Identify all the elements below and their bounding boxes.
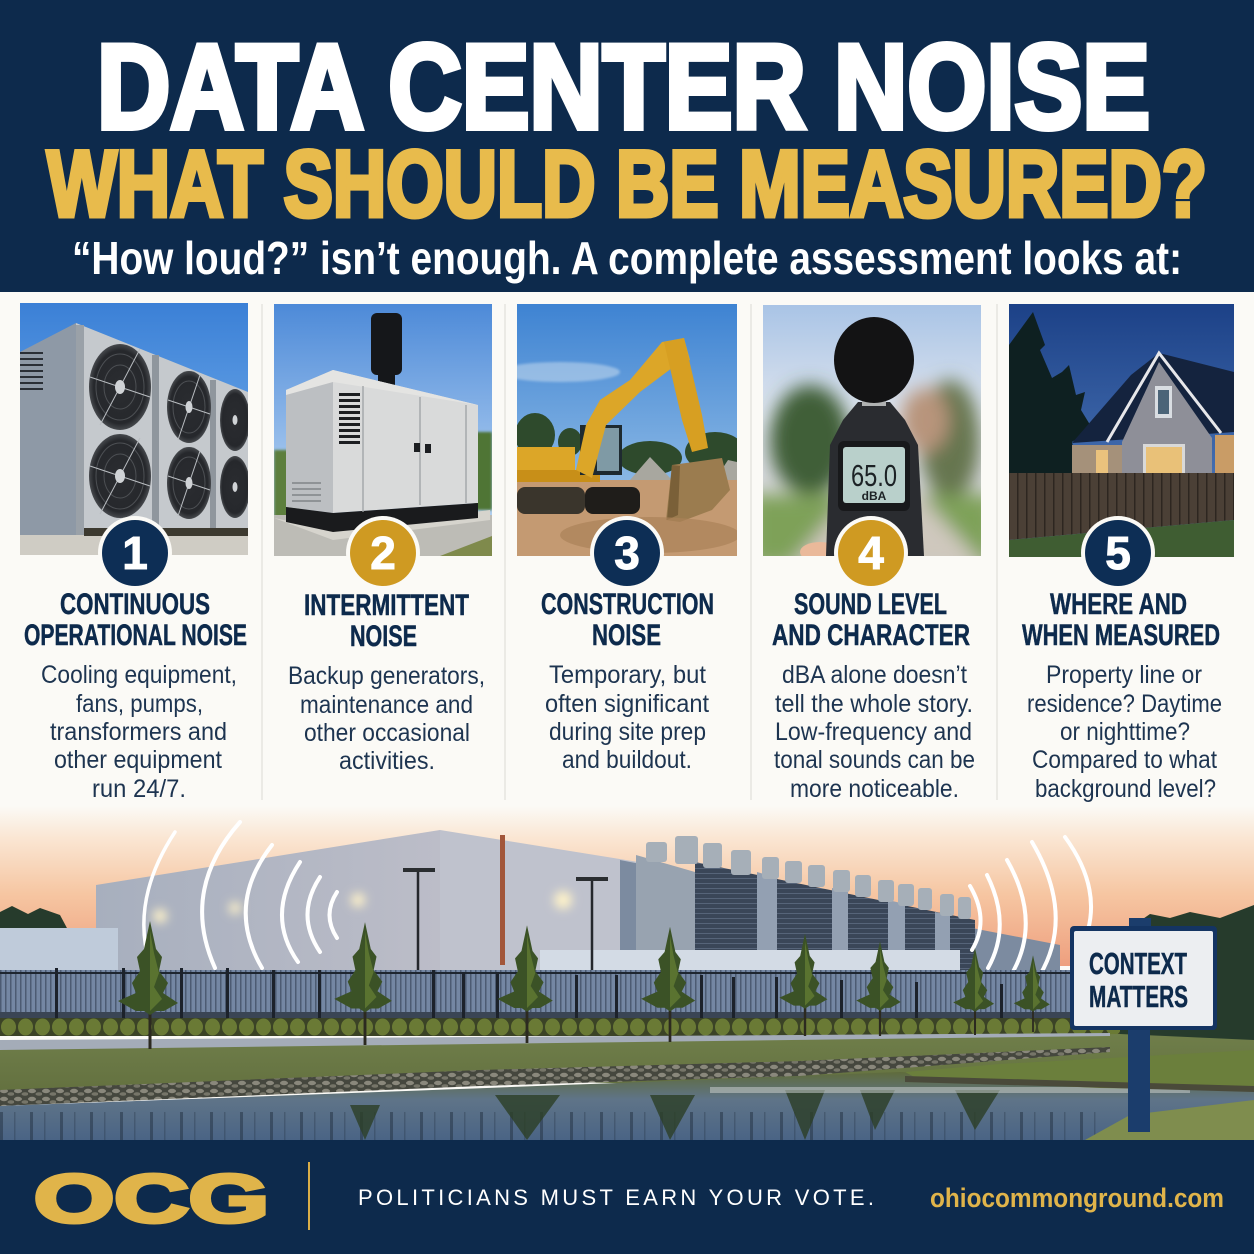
body 3: and buildout. bbox=[562, 746, 692, 774]
body 2 bbox=[288, 662, 485, 775]
heading 2: INTERMITTENT bbox=[304, 589, 469, 622]
panel: where and when measured bbox=[1009, 304, 1234, 803]
website: ohiocommonground.com bbox=[930, 1183, 1224, 1213]
badge 4 bbox=[834, 516, 908, 590]
badge 2: 2 bbox=[370, 527, 396, 579]
trees bbox=[118, 921, 1050, 1049]
tagline: POLITICIANS MUST EARN YOUR VOTE. bbox=[358, 1185, 874, 1210]
photo: excavator bbox=[517, 304, 737, 556]
photo: backup generator bbox=[274, 304, 492, 556]
sky bbox=[0, 806, 1254, 966]
photo: cooling fans bbox=[20, 303, 250, 555]
rock bank bbox=[0, 1047, 1110, 1106]
heading 5 bbox=[1022, 588, 1220, 652]
header banner bbox=[0, 0, 1254, 292]
road bbox=[0, 1033, 1110, 1050]
photo: sound level meter bbox=[763, 305, 981, 556]
badge 3: 3 bbox=[614, 527, 640, 579]
body 5 bbox=[1027, 661, 1222, 803]
body 1: transformers and bbox=[50, 718, 227, 746]
badge 1: 1 bbox=[122, 527, 148, 579]
body 5: or nighttime? bbox=[1060, 718, 1190, 746]
heading 3 bbox=[541, 588, 714, 652]
heading 4: AND CHARACTER bbox=[772, 619, 970, 652]
body 4: tonal sounds can be bbox=[774, 746, 975, 774]
heading 5: WHERE AND bbox=[1050, 588, 1187, 621]
hedge row bbox=[0, 1018, 1120, 1036]
photo: house at dusk bbox=[1009, 304, 1234, 557]
body 1: fans, pumps, bbox=[76, 690, 203, 718]
panel: continuous operational noise bbox=[20, 303, 250, 803]
lawn bbox=[0, 1034, 1254, 1090]
far bank bbox=[905, 1050, 1254, 1090]
body 3: often significant bbox=[545, 690, 709, 718]
badge 5: 5 bbox=[1105, 527, 1131, 579]
body 4: more noticeable. bbox=[790, 775, 959, 803]
sign: MATTERS bbox=[1089, 979, 1188, 1014]
logo: OCG: OCG bbox=[34, 1161, 269, 1237]
body 3: Temporary, but bbox=[549, 661, 706, 689]
badge 3 bbox=[590, 516, 664, 590]
sound waves bbox=[144, 822, 1091, 980]
body 2: other occasional bbox=[304, 719, 470, 747]
body 2: maintenance and bbox=[300, 691, 473, 719]
panel: sound level and character bbox=[763, 305, 981, 797]
badge 5 bbox=[1081, 516, 1155, 590]
heading 4 bbox=[772, 588, 970, 652]
body 2: Backup generators, bbox=[288, 662, 485, 690]
photo: sound level meter: dBA bbox=[862, 489, 887, 503]
body 5: Property line or bbox=[1046, 661, 1202, 689]
body 4: tell the whole story. bbox=[775, 690, 973, 718]
body 5: residence? Daytime bbox=[1027, 690, 1222, 718]
heading 1 bbox=[24, 588, 247, 652]
body 1: run 24/7. bbox=[92, 775, 186, 803]
body 1: other equipment bbox=[54, 746, 222, 774]
body 5: background level? bbox=[1035, 775, 1216, 803]
heading 3: CONSTRUCTION bbox=[541, 588, 714, 621]
pond bbox=[0, 1072, 1254, 1140]
heading 1: CONTINUOUS bbox=[60, 588, 210, 621]
badge 2 bbox=[346, 516, 420, 590]
heading 3: NOISE bbox=[592, 619, 661, 652]
heading 4: SOUND LEVEL bbox=[794, 588, 947, 621]
footer bbox=[0, 1140, 1254, 1254]
body 3: during site prep bbox=[549, 718, 706, 746]
data center building bbox=[0, 830, 1060, 970]
body 5: Compared to what bbox=[1032, 746, 1217, 774]
sign bbox=[1070, 918, 1217, 1132]
scene: data center at dusk bbox=[0, 806, 1254, 1140]
heading 2: NOISE bbox=[350, 620, 417, 653]
reeds bbox=[1085, 1100, 1254, 1140]
sign: CONTEXT bbox=[1089, 946, 1187, 981]
panel: intermittent noise bbox=[274, 304, 492, 775]
panel: construction noise bbox=[517, 304, 737, 768]
body 4: Low-frequency and bbox=[775, 718, 972, 746]
badge 4: 4 bbox=[858, 527, 884, 579]
badge 1 bbox=[98, 516, 172, 590]
body 1: Cooling equipment, bbox=[41, 661, 237, 689]
body 2: activities. bbox=[339, 747, 435, 775]
fence bbox=[0, 968, 1070, 1022]
meter reading: 65.0 bbox=[851, 458, 897, 493]
body 3 bbox=[545, 661, 709, 774]
body 4 bbox=[774, 661, 975, 803]
heading 1: OPERATIONAL NOISE bbox=[24, 619, 247, 652]
body 4: dBA alone doesn’t bbox=[782, 661, 967, 689]
heading 2 bbox=[304, 589, 469, 653]
distant trees bbox=[0, 905, 1254, 1040]
body 1 bbox=[41, 661, 237, 803]
